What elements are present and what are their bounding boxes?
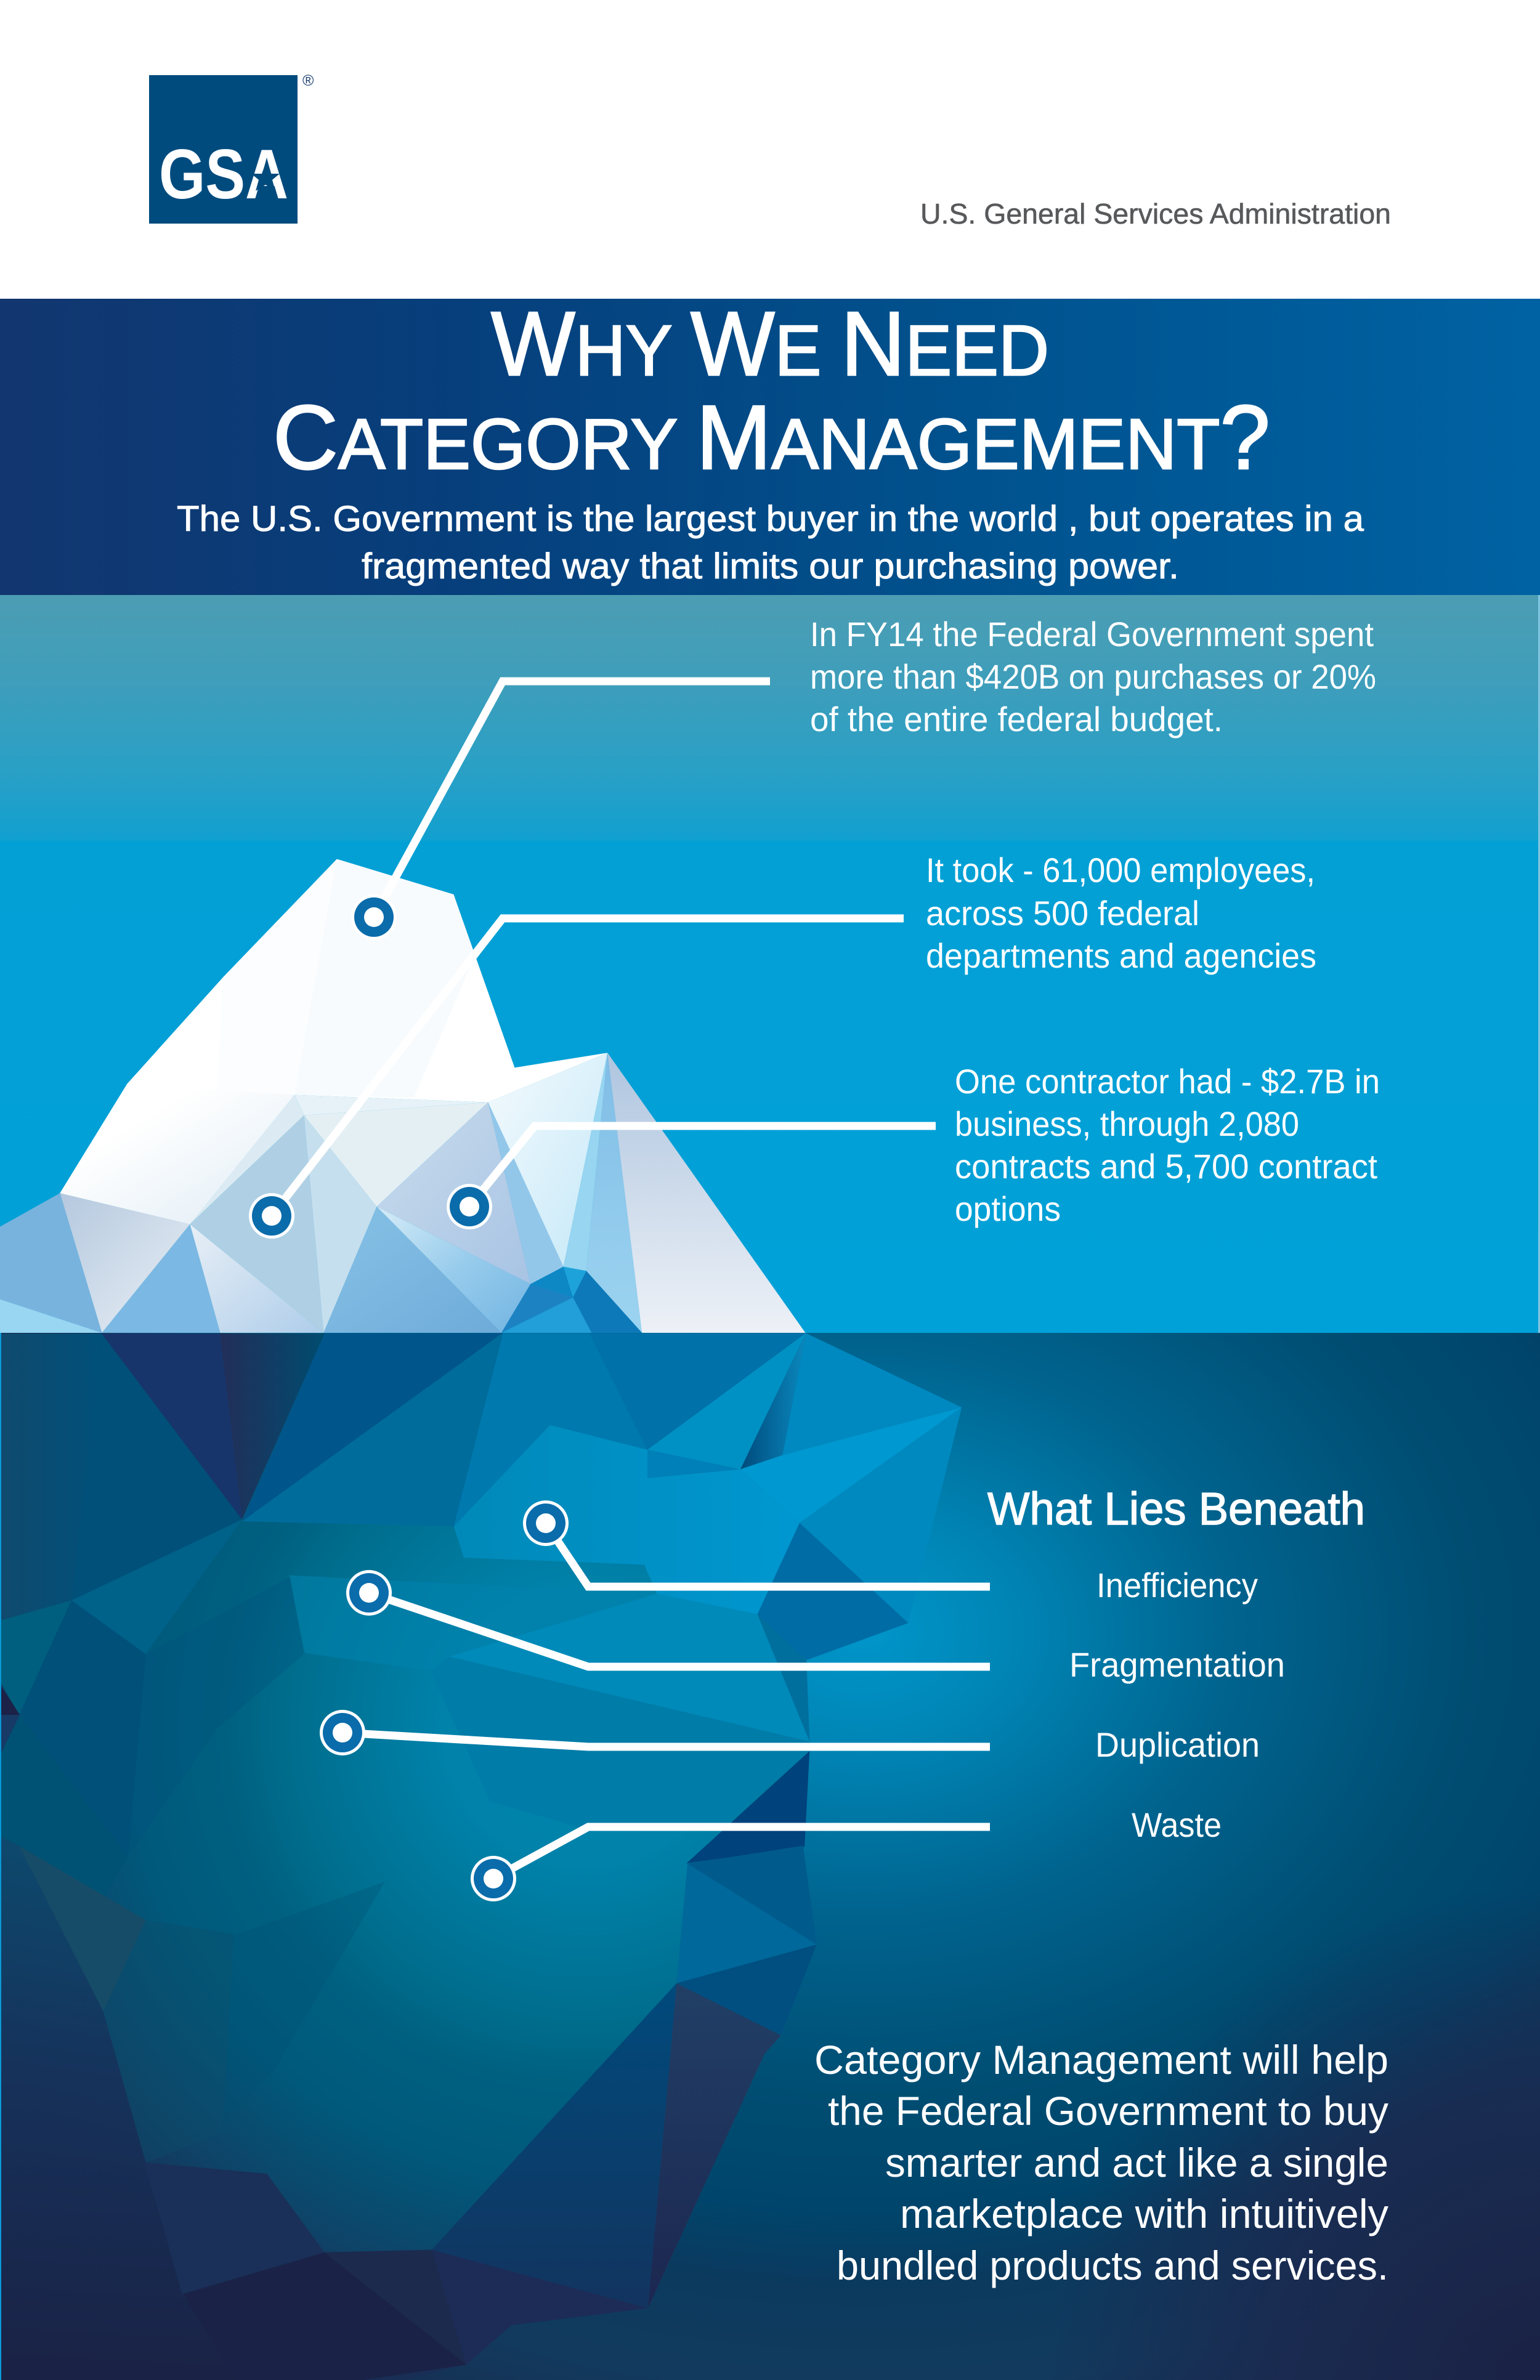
callout: employees bbox=[249, 851, 1316, 1239]
closing statement: the Federal Government to buy bbox=[828, 2088, 1388, 2134]
callout: employees: It took - 61,000 employees, bbox=[926, 851, 1315, 889]
right facets bbox=[289, 1333, 962, 1863]
connector: fragmentation: Fragmentation bbox=[1069, 1645, 1285, 1684]
closing statement: smarter and act like a single bbox=[885, 2140, 1388, 2185]
white page header background bbox=[0, 0, 1540, 299]
connector: inefficiency: Inefficiency bbox=[1096, 1566, 1258, 1605]
title: CATEGORY MANAGEMENT? bbox=[273, 387, 1270, 488]
closing statement: marketplace with intuitively bbox=[900, 2191, 1388, 2236]
bottom navy facets bbox=[144, 2163, 648, 2380]
iceberg below water bbox=[0, 1333, 962, 2380]
subtitle: The U.S. Government is the largest buyer in the world , but operates in a bbox=[177, 499, 1364, 539]
callout: employees: departments and agencies bbox=[926, 936, 1316, 975]
water edge line bbox=[0, 1333, 1, 2380]
closing statement: Category Management will help bbox=[814, 2037, 1388, 2082]
panel: sky water bbox=[0, 595, 1540, 1333]
subtitle: fragmented way that limits our purchasing power. bbox=[362, 546, 1179, 586]
callout: FY14 spend: more than $420B on purchases or 20% bbox=[810, 657, 1376, 696]
title bbox=[273, 293, 1270, 488]
upper central facets bbox=[242, 1333, 503, 1526]
title: WHY WE NEED bbox=[491, 293, 1049, 395]
closing statement bbox=[814, 2037, 1388, 2288]
callout: contractor bbox=[447, 1062, 1380, 1229]
subtitle bbox=[177, 499, 1364, 586]
callout: contractor: contracts and 5,700 contract bbox=[955, 1147, 1377, 1186]
closing statement: bundled products and services. bbox=[837, 2243, 1388, 2288]
panel: deep water bbox=[0, 1333, 1540, 2380]
callout: contractor: business, through 2,080 bbox=[955, 1104, 1299, 1143]
callout: contractor: options bbox=[955, 1189, 1061, 1228]
logo: GSA bbox=[149, 72, 314, 224]
lower right facets bbox=[223, 1846, 817, 2309]
connector: inefficiency bbox=[523, 1500, 1258, 1605]
callout: FY14 spend: of the entire federal budget. bbox=[810, 700, 1223, 739]
logo: GSA: GSA bbox=[159, 136, 288, 214]
connector: duplication: Duplication bbox=[1095, 1725, 1260, 1764]
panel: title band bbox=[0, 293, 1540, 595]
connector: fragmentation bbox=[346, 1570, 1285, 1684]
callout: contractor: One contractor had - $2.7B in bbox=[955, 1062, 1380, 1101]
logo: GSA: ® bbox=[302, 72, 314, 89]
agency name: U.S. General Services Administration bbox=[920, 198, 1391, 230]
iceberg above water bbox=[0, 859, 805, 1333]
callout: FY14 spend bbox=[351, 615, 1376, 940]
connector: waste: Waste bbox=[1132, 1805, 1222, 1844]
connector: waste bbox=[471, 1805, 1222, 1901]
heading: what lies beneath: What Lies Beneath bbox=[987, 1483, 1365, 1534]
callout: employees: across 500 federal bbox=[926, 894, 1199, 933]
callout: FY14 spend: In FY14 the Federal Government spent bbox=[810, 615, 1374, 654]
connector: duplication bbox=[320, 1710, 1260, 1764]
left facets bbox=[0, 1334, 325, 2380]
base silhouette bbox=[0, 1333, 962, 2380]
